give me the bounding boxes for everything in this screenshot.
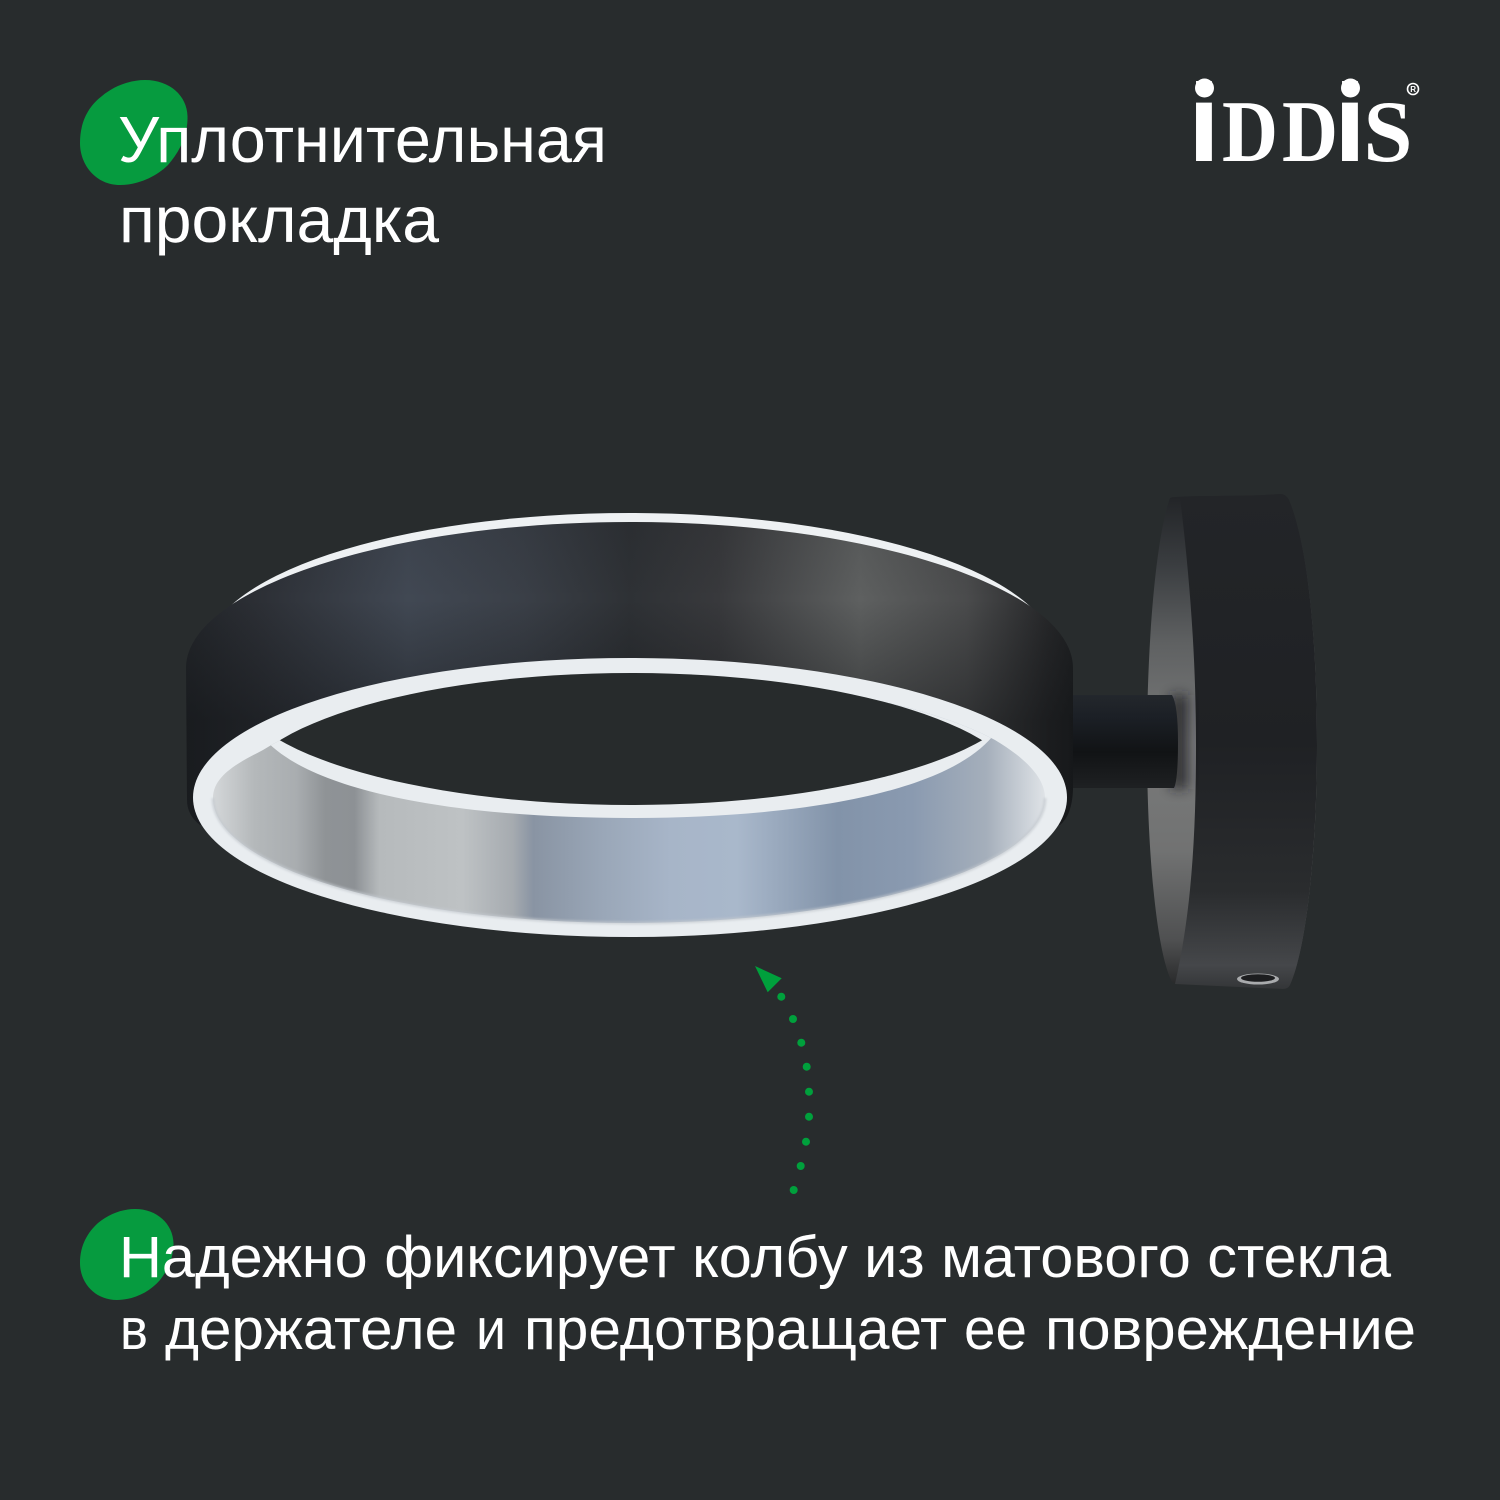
logo: IDDIS: S <box>1364 84 1412 181</box>
mount screw <box>1237 974 1279 984</box>
description text: предотвращает <box>524 1297 947 1362</box>
silver inner wall <box>213 680 1045 923</box>
description text: и <box>476 1297 506 1362</box>
description text: ее <box>964 1297 1027 1362</box>
arrow head <box>755 966 782 992</box>
logo: IDDIS: i <box>1334 62 1366 185</box>
green blob: description <box>80 1209 174 1300</box>
glowing top edge <box>205 513 1055 795</box>
green blob: title <box>80 80 188 185</box>
logo: IDDIS: i <box>1188 62 1220 185</box>
logo: IDDIS: R <box>1410 85 1416 94</box>
description text: повреждение <box>1045 1297 1416 1362</box>
dotted arrow <box>755 966 813 1194</box>
inner white lip <box>271 703 991 818</box>
description text: Надежно фиксирует колбу из матового стекла <box>119 1225 1392 1290</box>
wall mount disc <box>1147 494 1317 989</box>
logo: IDDIS: D <box>1222 84 1278 181</box>
description text <box>119 1225 1416 1362</box>
description text: в <box>120 1297 148 1362</box>
description text: держателе <box>165 1297 457 1362</box>
ring body <box>186 522 1073 825</box>
white diffuser rim <box>193 658 1067 937</box>
logo: IDDIS <box>1188 62 1418 185</box>
title: Уплотнительная <box>118 103 607 176</box>
connecting post <box>1068 695 1178 788</box>
title <box>118 103 607 256</box>
ring opening <box>280 673 982 805</box>
title: прокладка <box>119 183 440 256</box>
wall lamp product <box>186 494 1317 989</box>
logo: IDDIS: D <box>1282 84 1338 181</box>
